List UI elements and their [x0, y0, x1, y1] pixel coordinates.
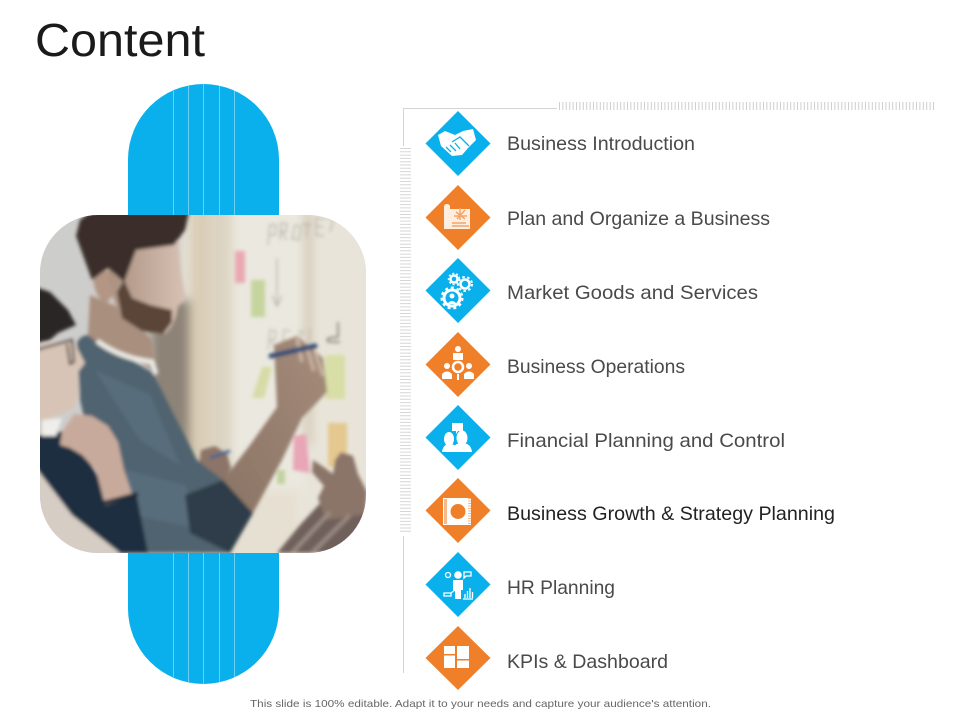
man's neck and collar	[88, 295, 156, 370]
blue capsule behind photo	[128, 84, 279, 684]
footer note: This slide is 100% editable. Adapt it to your needs and capture your audience's attention.	[250, 698, 711, 710]
whiteboard handwriting	[268, 216, 336, 351]
man's sweater	[75, 333, 232, 553]
woman's lower body	[30, 430, 148, 553]
icon: handshake on blue diamond	[426, 111, 490, 176]
title: Content	[35, 14, 205, 66]
woman's hair	[40, 286, 78, 345]
label: Business Introduction: Business Introduction	[507, 133, 695, 155]
sticky notes	[235, 251, 347, 484]
woman's glasses	[36, 340, 74, 364]
label: Market Goods and Services: Market Goods and Services	[507, 282, 758, 304]
marker pen	[271, 346, 315, 356]
man's hair	[76, 208, 190, 282]
man's forearm and hand	[223, 336, 327, 513]
woman's face	[35, 340, 85, 425]
label: HR Planning: HR Planning	[507, 577, 615, 599]
man's beard	[117, 280, 172, 334]
woman's hand	[60, 414, 133, 505]
man's face	[108, 238, 186, 334]
icon: dashboard tiles on orange diamond	[426, 626, 490, 690]
frame lines and hatching	[404, 106, 934, 673]
label: Plan and Organize a Business: Plan and Organize a Business	[507, 208, 770, 230]
icon: two people with dollar bubble on blue diamond	[426, 405, 490, 470]
man's second hand and pen	[199, 446, 231, 484]
icon: blueprint on orange diamond	[426, 185, 490, 250]
label: KPIs and Dashboard: KPIs & Dashboard	[507, 651, 668, 673]
label: Business Operations: Business Operations	[507, 356, 685, 378]
label: Financial Planning and Control: Financial Planning and Control	[507, 430, 785, 452]
background hand and sleeve on right	[277, 452, 367, 553]
icon: gears with person on blue diamond	[426, 258, 490, 323]
icon: team around gear on orange diamond	[426, 332, 490, 397]
icon: person with charts on blue diamond	[426, 552, 490, 617]
man's ear	[93, 270, 114, 304]
list labels	[507, 133, 835, 673]
icon: notebook on orange diamond	[426, 478, 490, 543]
photo: team planning at whiteboard	[40, 215, 366, 553]
label: Business Growth and Strategy Planning: Business Growth & Strategy Planning	[507, 503, 835, 525]
